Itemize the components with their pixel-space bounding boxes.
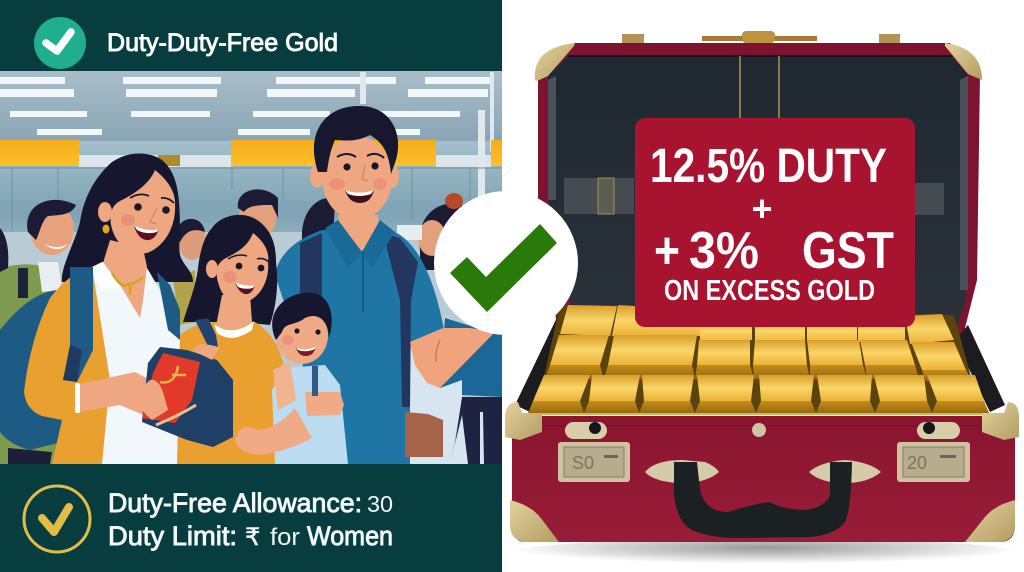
collar	[92, 262, 122, 292]
cardigan	[24, 267, 112, 464]
bystander behind	[405, 345, 462, 464]
shirt	[177, 322, 290, 464]
backpack	[0, 290, 70, 450]
allowance text: Duty-Free Allowance:	[108, 488, 362, 518]
suitcase shadow	[507, 538, 1023, 570]
red callout: duty and GST: GST	[802, 222, 894, 280]
red callout: duty and GST: 3%	[689, 222, 759, 280]
gold bars front row	[528, 375, 989, 413]
woman with gold necklace	[0, 154, 193, 464]
handle mounts	[645, 460, 881, 483]
necklace	[112, 273, 143, 295]
airport wall	[0, 141, 502, 271]
icon: green check badge	[34, 17, 86, 69]
long hair	[62, 154, 193, 282]
red callout: duty and GST: 12.5% DUTY	[650, 140, 887, 193]
brass corner top left	[535, 43, 575, 81]
combination lock right	[897, 442, 970, 482]
panel: airport family illustration	[0, 71, 502, 470]
combination lock left: S0	[572, 453, 594, 473]
combination lock left	[558, 442, 630, 482]
open lid	[515, 43, 1005, 412]
icon: gold check ring	[24, 486, 90, 552]
allowance text: ₹	[245, 524, 260, 551]
ceiling lights	[0, 77, 490, 135]
red callout: duty and GST	[635, 118, 915, 327]
lid straps	[564, 178, 944, 215]
top clasps	[622, 31, 900, 43]
hair	[183, 215, 277, 325]
combination lock right: 20	[907, 453, 927, 473]
girl in orange shirt	[177, 215, 290, 464]
panel: top title bar	[0, 0, 502, 71]
navy bag with red pouch	[132, 344, 233, 447]
orange signs	[0, 140, 79, 166]
straps	[63, 267, 93, 382]
little boy	[235, 293, 348, 464]
backpack straps	[300, 233, 322, 320]
brass corners of the base	[505, 402, 1019, 542]
gold bar backing	[528, 305, 989, 414]
neck	[216, 295, 252, 332]
interior side walls	[515, 305, 1005, 412]
allowance text: for	[270, 524, 300, 551]
suitcase base	[505, 402, 1019, 542]
airport ceiling	[0, 71, 502, 141]
neck	[103, 240, 147, 318]
raised arm	[410, 328, 495, 388]
red callout: duty and GST: ON EXCESS GOLD	[664, 275, 875, 307]
latches	[565, 422, 960, 439]
handle	[674, 462, 852, 538]
brass corner top right	[945, 43, 982, 80]
shirt	[275, 230, 445, 464]
face	[217, 233, 268, 303]
gold bars middle row	[545, 335, 972, 381]
gold bars back row	[560, 305, 954, 344]
forearm	[80, 372, 168, 418]
panel: right background	[502, 0, 1024, 572]
allowance text: 30	[367, 491, 393, 517]
title: Duty-Duty-Free Gold	[107, 29, 338, 57]
face	[110, 170, 175, 253]
brown bag	[405, 412, 443, 457]
panel: bottom allowance bar	[0, 464, 502, 572]
allowance text	[108, 488, 393, 551]
icon: large green check badge	[434, 191, 578, 335]
red callout: duty and GST: +	[751, 188, 773, 229]
red callout: duty and GST: +	[654, 222, 680, 280]
allowance text: Women	[307, 521, 393, 551]
illustration: open suitcase with gold	[505, 31, 1023, 570]
allowance text: Duty Limit:	[108, 521, 237, 551]
white shirt	[92, 262, 180, 464]
background travellers	[0, 189, 465, 464]
head	[310, 164, 324, 188]
man with raised arm	[275, 106, 502, 464]
